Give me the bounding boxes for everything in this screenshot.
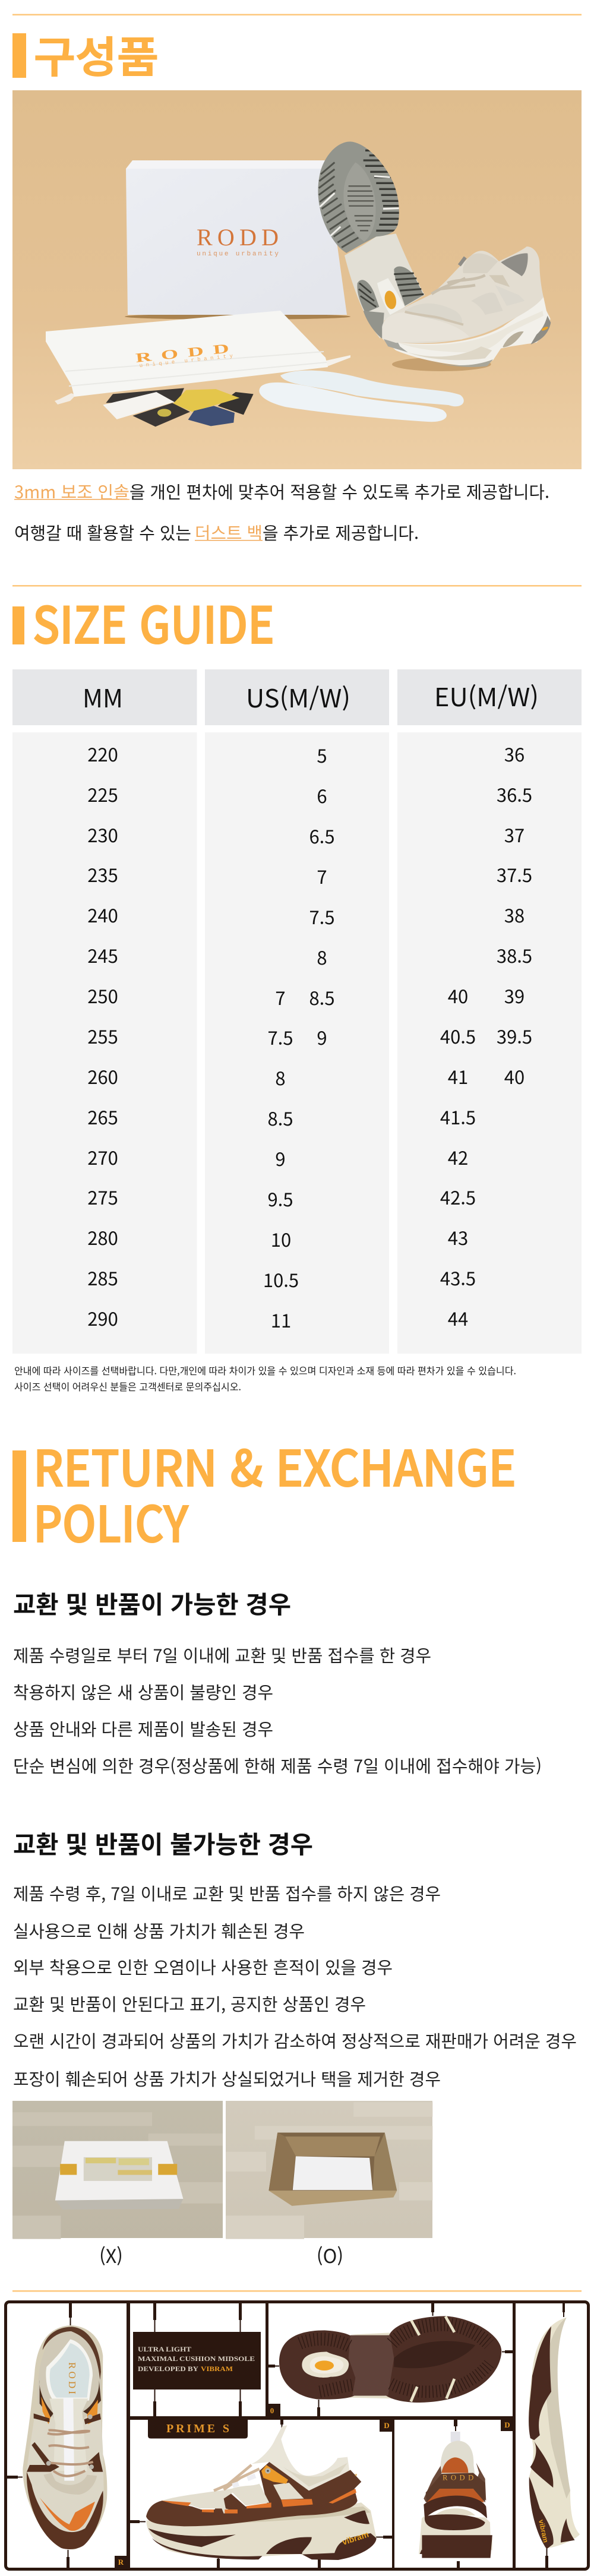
- strip vibram logo: vibram: [537, 2519, 550, 2543]
- list: exchange possible: [13, 1642, 542, 1778]
- size note: 안내에 따라 사이즈를 선택바랍니다. 다만,개인에 따라 차이가 있을 수 있으며 디자인과 소재 등에 따라 편차가 있을 수 있습니다.: [14, 1363, 516, 1377]
- label: O: (O): [317, 2242, 343, 2269]
- column: MM: 250: [87, 982, 118, 1009]
- column: MM: 240: [87, 901, 118, 928]
- column: EU: 42.5: [440, 1183, 476, 1210]
- shoe: side view: [146, 2425, 377, 2560]
- label: PRIME S: [148, 2419, 248, 2439]
- back view: heel: [419, 2432, 491, 2554]
- column: MM: 290: [87, 1304, 118, 1331]
- column: US: 6.5: [309, 822, 335, 849]
- table header: [12, 669, 582, 725]
- dust bag: RODD: [135, 341, 230, 365]
- box: unique urbanity: [197, 251, 279, 258]
- column: EU: 39.5: [497, 1022, 532, 1049]
- side view: sole: [146, 2502, 377, 2560]
- list: exchange possible: 제품 수령일로 부터 7일 이내에 교환 및 반품 접수를 한 경우: [13, 1642, 431, 1667]
- column: US: 7: [275, 984, 286, 1010]
- runners: [6, 2300, 588, 2571]
- column: MM: 255: [87, 1022, 118, 1049]
- heading: return and exchange policy: [12, 1429, 516, 1556]
- list: exchange not possible: 교환 및 반품이 안된다고 표기, 공지한 상품인 경우: [13, 1991, 366, 2016]
- column: EU: 37: [504, 821, 525, 848]
- column: US: 7.5: [267, 1023, 293, 1050]
- column: US: 6: [317, 782, 327, 808]
- column: US: 7: [317, 862, 327, 889]
- text: components note: 을 개인 편차에 맞추어 적용할 수 있도록 추가로 제공합니다.: [129, 479, 549, 504]
- tag: O: [266, 2404, 280, 2417]
- tag: D side: D: [384, 2421, 390, 2430]
- column: US: 11: [271, 1306, 291, 1333]
- list: exchange possible: 상품 안내와 다른 제품이 발송된 경우: [13, 1716, 273, 1741]
- heading: return and exchange policy: POLICY: [33, 1485, 189, 1556]
- callout: midsole text: DEVELOPED BY: [138, 2365, 198, 2373]
- column: EU: 41: [448, 1063, 468, 1089]
- insole logo: RODI: [67, 2362, 78, 2394]
- box: RODD: [197, 224, 279, 251]
- table body: [12, 732, 582, 1354]
- side view: upper: [146, 2425, 361, 2526]
- list: exchange not possible: [13, 1880, 577, 2091]
- insoles: [259, 371, 464, 422]
- column: MM: 225: [87, 780, 118, 807]
- list: exchange not possible: 오랜 시간이 경과되어 상품의 가치가 감소하여 정상적으로 재판매가 어려운 경우: [13, 2028, 577, 2053]
- list: exchange not possible: 제품 수령 후, 7일 이내로 교환 및 반품 접수를 하지 않은 경우: [13, 1880, 441, 1905]
- column: MM: 275: [87, 1183, 118, 1210]
- text: components note: 더스트 백: [195, 520, 263, 545]
- column: EU: 39: [504, 982, 525, 1009]
- tag: D side: [380, 2419, 393, 2432]
- shoe: outsole: [279, 2316, 501, 2403]
- tag: R: R: [118, 2558, 124, 2566]
- list: exchange possible: 착용하지 않은 새 상품이 불량인 경우: [13, 1679, 273, 1704]
- column: MM: [87, 740, 118, 1331]
- column: US: 9: [317, 1023, 327, 1050]
- column: MM: 230: [87, 821, 118, 848]
- column: US: [263, 741, 335, 1333]
- list: exchange possible: 단순 변심에 의한 경우(정상품에 한해 제품 수령 7일 이내에 접수해야 가능): [13, 1753, 542, 1778]
- heading: return and exchange policy: RETURN & EXCHANGE: [33, 1429, 516, 1500]
- hang tags: [103, 388, 254, 426]
- column: US: 10.5: [263, 1266, 299, 1292]
- heading: size guide: SIZE GUIDE: [33, 585, 274, 658]
- column: EU: 40: [504, 1063, 525, 1089]
- callout: midsole text: ULTRA LIGHT: [138, 2345, 191, 2353]
- shoe: top view: [23, 2325, 107, 2549]
- column: MM: 235: [87, 861, 118, 887]
- column: MM: 270: [87, 1143, 118, 1170]
- column: EU: 40.5: [440, 1022, 476, 1049]
- box: [125, 160, 350, 320]
- column: US: 9: [275, 1145, 286, 1171]
- panel: model kit style sneaker frame: [6, 2300, 588, 2571]
- size note: [14, 1363, 516, 1393]
- column: EU: 43.5: [440, 1264, 476, 1291]
- side view: vibram logo: vibram: [341, 2529, 370, 2547]
- column: EU: 36.5: [497, 780, 532, 807]
- column: EU: 43: [448, 1224, 468, 1250]
- column: MM: 260: [87, 1063, 118, 1089]
- column: EU: 36: [504, 740, 525, 767]
- list: exchange not possible: 외부 착용으로 인한 오염이나 사용한 흔적이 있을 경우: [13, 1954, 393, 1979]
- column: US: 10: [271, 1225, 291, 1252]
- column: EU: 42: [448, 1143, 468, 1170]
- shoe: lateral sole strip: [529, 2318, 580, 2549]
- column: EU: 44: [448, 1304, 468, 1331]
- shoe: back view: [419, 2432, 492, 2558]
- dust bag: [46, 311, 350, 404]
- photo: box, dust bag, insoles and sneakers: [12, 90, 582, 469]
- column: US: 8.5: [267, 1104, 293, 1131]
- column: EU: 41.5: [440, 1103, 476, 1130]
- column: US: 8: [317, 943, 327, 970]
- label: PRIME S: PRIME S: [166, 2422, 229, 2435]
- column: EU: 37.5: [497, 861, 532, 887]
- column: EU: 38.5: [497, 941, 532, 968]
- column: US: 9.5: [267, 1185, 293, 1212]
- callout: midsole text: VIBRAM: [201, 2365, 233, 2373]
- callout: midsole text: MAXIMAL CUSHION MIDSOLE: [138, 2354, 255, 2363]
- column: US: 7.5: [309, 903, 335, 930]
- column: MM: 280: [87, 1224, 118, 1250]
- text: components note: 을 추가로 제공합니다.: [263, 520, 419, 545]
- tag: D back: D: [504, 2420, 510, 2429]
- tag: O: 0: [270, 2406, 274, 2415]
- dust bag: unique urbanity: [139, 353, 233, 369]
- column: MM: 285: [87, 1264, 118, 1291]
- text: components note: 3mm 보조 인솔: [14, 479, 129, 504]
- column: MM: 245: [87, 941, 118, 968]
- column: MM: 265: [87, 1103, 118, 1130]
- column: EU: 38: [504, 901, 525, 928]
- tag: D back: [501, 2419, 513, 2431]
- sneakers: [318, 141, 551, 371]
- photo: wrong return box with shipping label: [12, 2101, 223, 2239]
- label: X: (X): [99, 2242, 123, 2269]
- column: US: 8: [275, 1064, 286, 1091]
- size note: 사이즈 선택이 어려우신 분들은 고객센터로 문의주십시오.: [14, 1379, 241, 1393]
- side view: upper: R: [353, 2474, 357, 2476]
- back view: heel: RODD: [443, 2473, 473, 2482]
- sneaker: standing sole: [318, 141, 425, 339]
- text: components note: 여행갈 때 활용할 수 있는: [14, 520, 191, 545]
- table: size guide: [12, 669, 582, 1354]
- tag: R: [115, 2556, 128, 2569]
- list: exchange not possible: 포장이 훼손되어 상품 가치가 상실되었거나 택을 제거한 경우: [13, 2066, 441, 2091]
- heading: components: 구성품: [34, 23, 159, 85]
- column: EU: [440, 740, 532, 1331]
- back view: outsole: [422, 2535, 492, 2558]
- text: components note: [14, 479, 549, 545]
- table header: US(M/W): [246, 679, 350, 715]
- sneaker: side: [382, 246, 551, 367]
- table header: MM: [83, 679, 123, 715]
- photo: correct return box with outer carton: [203, 2101, 432, 2576]
- list: exchange not possible: 실사용으로 인해 상품 가치가 훼손된 경우: [13, 1918, 305, 1943]
- column: US: 8.5: [309, 984, 335, 1010]
- table header: EU(M/W): [434, 678, 539, 714]
- column: MM: 220: [87, 740, 118, 767]
- callout: midsole text: [133, 2332, 261, 2389]
- heading: exchange not possible: 교환 및 반품이 불가능한 경우: [13, 1825, 313, 1860]
- column: US: 5: [317, 741, 327, 768]
- heading: exchange possible: 교환 및 반품이 가능한 경우: [13, 1585, 291, 1620]
- column: EU: 40: [448, 982, 468, 1009]
